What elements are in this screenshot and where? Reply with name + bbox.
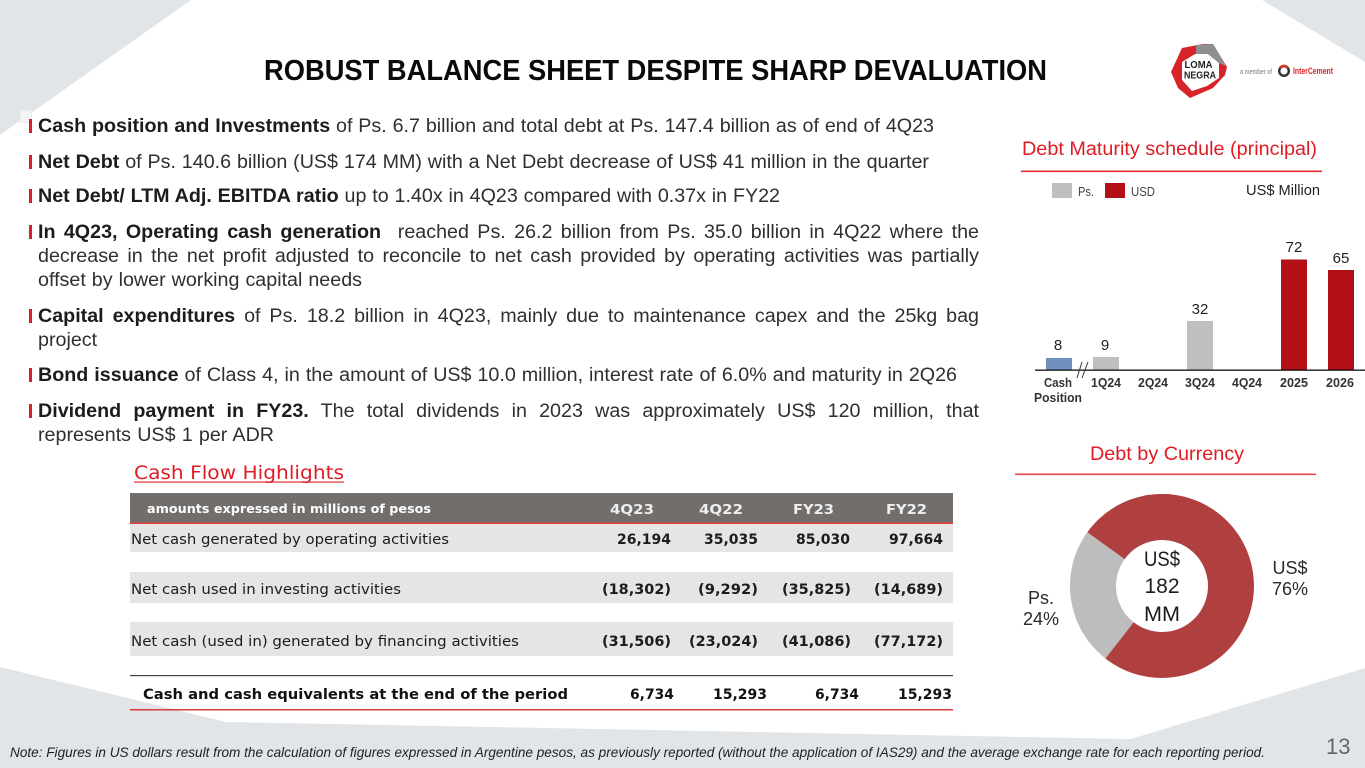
table row: financing activities: (41,086)	[782, 634, 851, 650]
table row: closing cash total	[130, 675, 953, 710]
logo wordmark: NEGRA	[1184, 70, 1216, 82]
table row: financing activities: (31,506)	[602, 634, 671, 650]
table row: financing activities: (23,024)	[689, 634, 758, 650]
donut centre total	[1144, 548, 1180, 626]
donut centre total: MM	[1144, 603, 1180, 626]
table header: FY23	[793, 502, 834, 518]
bar chart: 4Q24	[1232, 376, 1262, 390]
icon: InterCement ring	[1279, 66, 1289, 76]
donut centre total: US$	[1144, 548, 1180, 571]
donut label: US$ share: 76%	[1272, 579, 1308, 599]
table row: financing activities: Net cash (used in) generated by financing activities	[131, 634, 519, 650]
table row: investing activities: (18,302)	[602, 582, 671, 598]
text block: key bullet points: Cash position and Investments of Ps. 6.7 billion and total debt at Ps. 147.4 billion as of end of 4Q23	[38, 115, 934, 137]
table row: closing cash total: 6,734	[815, 687, 859, 703]
legend: USD	[1131, 184, 1155, 199]
text block: key bullet points: project	[38, 329, 97, 351]
table row: investing activities: (35,825)	[782, 582, 851, 598]
text block: key bullet points: Capital expenditures of Ps. 18.2 billion in 4Q23, mainly due to maintenance capex and the 25kg bag	[38, 305, 979, 327]
text block: key bullet points: represents US$ 1 per ADR	[38, 424, 274, 446]
donut label: Ps. share: 24%	[1023, 609, 1059, 629]
text block: key bullet points: Bond issuance of Class 4, in the amount of US$ 10.0 million, interest rate of 6.0% and maturity in 2Q26	[38, 364, 957, 386]
logo: Loma Negra and InterCement	[1171, 44, 1333, 98]
table row: investing activities: (14,689)	[874, 582, 943, 598]
bar chart: Position	[1034, 391, 1082, 405]
text block: key bullet points: Net Debt/ LTM Adj. EBITDA ratio up to 1.40x in 4Q23 compared with 0.37x in FY22	[38, 185, 780, 207]
bar chart: 3Q24	[1185, 376, 1215, 390]
text block: key bullet points: In 4Q23, Operating cash generation reached Ps. 26.2 billion from Ps. 35.0 billion in 4Q22 where the	[38, 221, 979, 243]
page number: 13	[1326, 734, 1350, 759]
heading: cash flow highlights: Cash Flow Highlights	[134, 462, 344, 484]
legend	[1052, 183, 1155, 199]
table row: investing activities: (9,292)	[698, 582, 758, 598]
bar chart: 72	[1286, 239, 1302, 256]
bar chart: 8	[1054, 337, 1062, 354]
legend: Ps.	[1078, 184, 1094, 199]
table row: operating activities: 35,035	[704, 532, 758, 548]
text block: key bullet points: decrease in the net profit adjusted to reconcile to net cash provided by operating activities was partially	[38, 245, 979, 267]
heading underline	[134, 482, 344, 483]
title: ROBUST BALANCE SHEET DESPITE SHARP DEVALUATION	[264, 55, 1047, 87]
table row: operating activities: 26,194	[617, 532, 671, 548]
heading underline	[1015, 474, 1316, 475]
logo wordmark: LOMA	[1184, 59, 1213, 71]
panel: debt by currency	[1015, 443, 1316, 678]
bar chart: 2026	[1326, 376, 1354, 390]
footnote: Note: Figures in US dollars result from the calculation of figures expressed in Argentine pesos, as previously reported (without the application of IAS29) and the average exchange rate for each reporting period.	[10, 744, 1265, 760]
heading: debt maturity: Debt Maturity schedule (principal)	[1022, 138, 1317, 160]
table row: closing cash total: Cash and cash equivalents at the end of the period	[143, 687, 568, 703]
donut centre total: 182	[1144, 575, 1180, 598]
table row: closing cash total: 15,293	[898, 687, 952, 703]
bar chart: 65	[1333, 250, 1349, 267]
bar chart: 9	[1101, 337, 1109, 354]
bar chart: 32	[1192, 301, 1208, 318]
table row: operating activities: 85,030	[796, 532, 850, 548]
table row: financing activities: (77,172)	[874, 634, 943, 650]
table row: financing activities	[130, 622, 953, 656]
table row: closing cash total: 6,734	[630, 687, 674, 703]
bar chart: 1Q24	[1091, 376, 1121, 390]
panel: cash flow highlights	[130, 462, 953, 710]
donut label: US$ share: US$	[1272, 558, 1308, 578]
InterCement wordmark: InterCement	[1293, 66, 1333, 76]
donut chart	[1070, 494, 1254, 678]
table header: amounts expressed in millions of pesos	[147, 502, 431, 516]
text block: key bullet points: offset by lower working capital needs	[38, 269, 362, 291]
table row: closing cash total: 15,293	[713, 687, 767, 703]
faint placeholder square	[20, 110, 32, 122]
donut label: Ps. share	[1023, 588, 1059, 629]
table row: operating activities: Net cash generated by operating activities	[131, 532, 449, 548]
heading underline	[1021, 170, 1322, 172]
logo wordmark	[1184, 59, 1216, 82]
table header: 4Q23	[610, 502, 654, 518]
donut label: US$ share	[1272, 558, 1308, 599]
table row: investing activities	[130, 572, 953, 603]
text block: key bullet points	[29, 115, 979, 446]
bar chart	[1034, 239, 1365, 405]
bar chart: Cash	[1044, 376, 1072, 390]
unit label: US$ Million	[1246, 183, 1320, 199]
text block: key bullet points: Dividend payment in FY23. The total dividends in 2023 was approximately US$ 120 million, that	[38, 400, 979, 422]
member-of text: a member of	[1240, 69, 1272, 76]
text block: key bullet points: Net Debt of Ps. 140.6 billion (US$ 174 MM) with a Net Debt decrease of US$ 41 million in the quarter	[38, 151, 929, 173]
panel: debt maturity schedule	[1021, 138, 1365, 405]
table header: FY22	[886, 502, 927, 518]
donut label: Ps. share: Ps.	[1028, 588, 1054, 608]
table header: 4Q22	[699, 502, 743, 518]
table row: operating activities: 97,664	[889, 532, 943, 548]
table header	[130, 493, 953, 524]
table row: operating activities	[130, 524, 953, 552]
table row: investing activities: Net cash used in investing activities	[131, 582, 401, 598]
bar chart: 2Q24	[1138, 376, 1168, 390]
heading: debt by currency: Debt by Currency	[1090, 443, 1244, 465]
icon: Loma Negra ring	[1171, 44, 1227, 98]
bar chart: 2025	[1280, 376, 1308, 390]
